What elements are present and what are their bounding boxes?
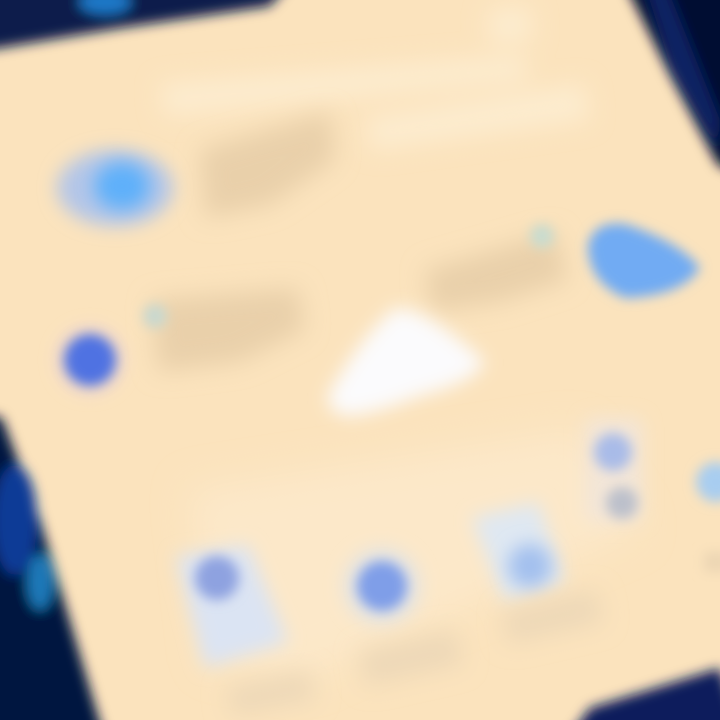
icon: left blue circle [52, 322, 128, 398]
dark corner: bottom left [0, 410, 108, 720]
icon: far right blue dot [696, 462, 720, 502]
icon: right blue stack [585, 418, 643, 522]
label: far right text [704, 552, 720, 572]
icon: upper right blue blob [588, 223, 700, 298]
dark corner: top left [0, 0, 300, 52]
icon: small teal dot middle left [143, 304, 167, 328]
dark corner: top right [618, 0, 720, 180]
icon: upper left blue badge [57, 150, 173, 226]
text block: upper right [425, 232, 568, 312]
card: lower right tile [472, 502, 565, 602]
text block: middle left [152, 288, 305, 372]
icon: central white cloud [328, 308, 485, 416]
icon: small teal dot upper right [530, 224, 554, 248]
title: light heading bands [160, 6, 590, 150]
label: lower centre caption [358, 630, 464, 686]
label: lower right caption [502, 590, 604, 644]
panel: lower light band [190, 430, 640, 680]
label: lower left tile caption [226, 670, 316, 716]
text block: upper left [200, 112, 335, 218]
card: lower centre icon [344, 548, 420, 624]
card: lower left tile [176, 545, 288, 668]
dark corner: bottom right [560, 668, 720, 720]
